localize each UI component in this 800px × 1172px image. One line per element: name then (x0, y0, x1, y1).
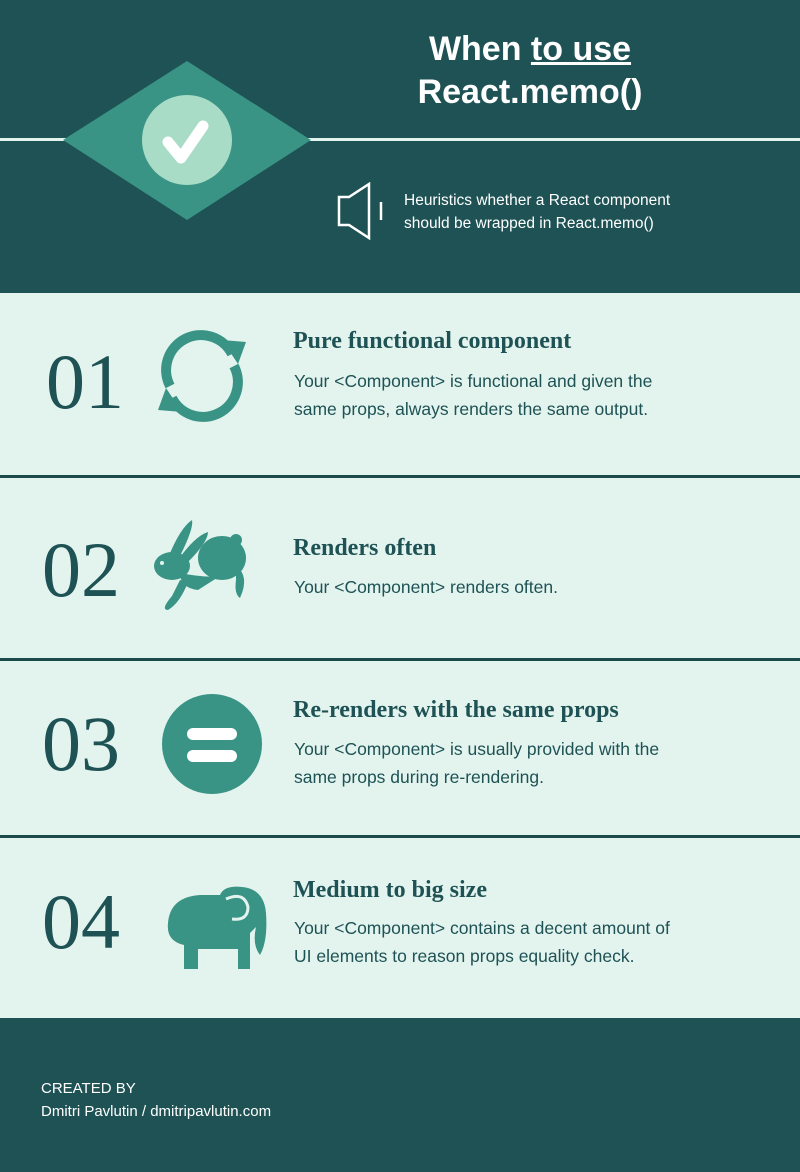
icon: rabbit (154, 520, 246, 610)
heading: Re-renders with the same props (293, 697, 619, 723)
text: same props during re-rendering. (294, 767, 544, 787)
number 01: 01 (46, 338, 124, 425)
title: When to use (429, 30, 631, 68)
footer (0, 1018, 800, 1172)
heading: Medium to big size (293, 877, 487, 903)
credits: CREATED BY (41, 1080, 136, 1097)
number 03: 03 (42, 700, 120, 787)
subtitle: should be wrapped in React.memo() (404, 215, 654, 232)
credits: Dmitri Pavlutin / dmitripavlutin.com (41, 1103, 271, 1120)
text: UI elements to reason props equality check. (294, 946, 634, 966)
text: Your <Component> is functional and given the (294, 371, 652, 391)
row 03 (42, 694, 659, 794)
row 04 (42, 877, 670, 969)
text: Your <Component> is usually provided with the (294, 739, 659, 759)
row 02 (42, 520, 558, 613)
credits (41, 1080, 271, 1120)
text: Your <Component> contains a decent amount of (294, 918, 670, 938)
icon: elephant (168, 886, 266, 969)
icon: cycle (158, 330, 246, 422)
heading: Pure functional component (293, 328, 571, 354)
text (294, 739, 659, 787)
number 04: 04 (42, 878, 120, 965)
number 02: 02 (42, 526, 120, 613)
text (294, 371, 652, 419)
title: React.memo() (418, 73, 642, 111)
text: same props, always renders the same output. (294, 399, 648, 419)
subtitle (404, 192, 670, 232)
header panel (0, 0, 800, 293)
icon: equals (162, 694, 262, 794)
header line (0, 138, 800, 141)
subtitle: Heuristics whether a React component (404, 192, 670, 209)
heading: Renders often (293, 535, 436, 561)
icon: diamond with check (63, 61, 311, 220)
text (294, 918, 670, 966)
text: Your <Component> renders often. (294, 577, 558, 597)
title (418, 30, 642, 111)
row 01 (46, 328, 652, 425)
icon: speaker (338, 182, 382, 240)
